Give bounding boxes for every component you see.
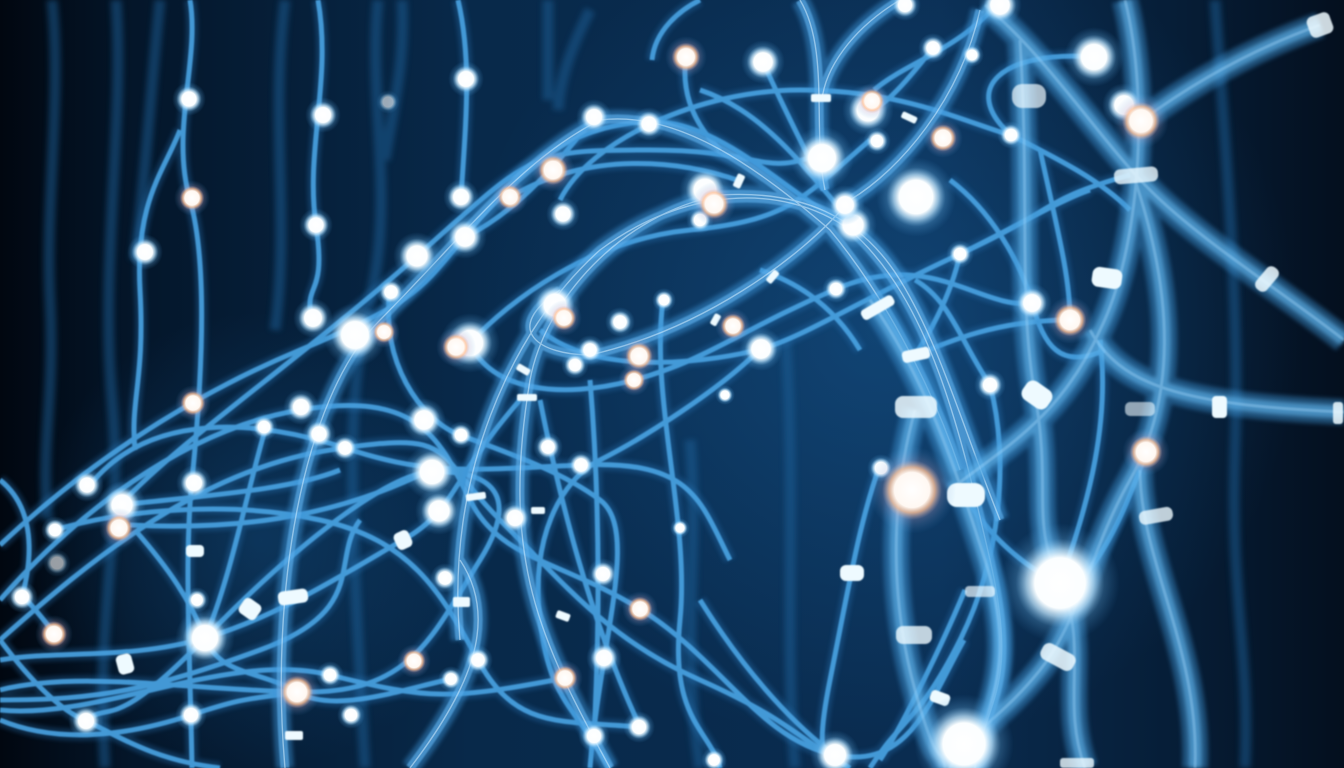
translucent foreground tubes [281, 0, 1002, 768]
glowing nodes: warm [35, 36, 1170, 716]
thick glowing tube bundles on the right [870, 0, 1344, 768]
